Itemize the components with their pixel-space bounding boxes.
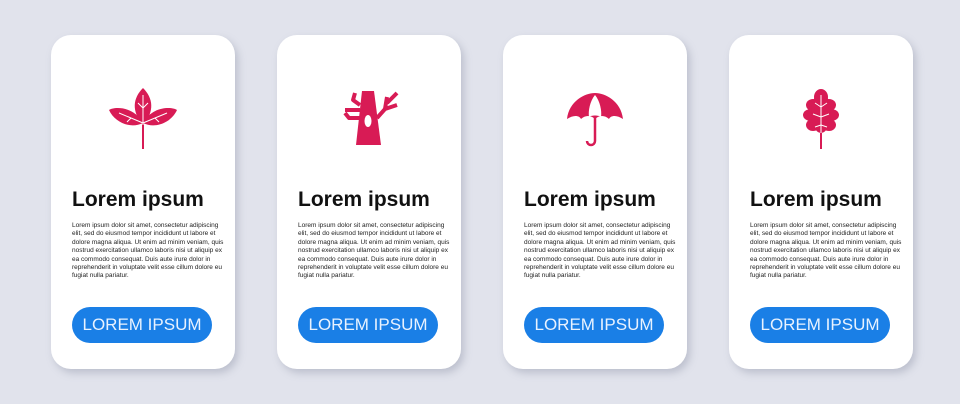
- button: LOREM IPSUM: [534, 315, 654, 334]
- icon: umbrella: [567, 93, 623, 146]
- card 1: leaf: [51, 35, 235, 369]
- heading: Lorem ipsum: [750, 188, 882, 211]
- body text: Lorem ipsum dolor sit amet, consectetur adipiscing elit, sed do eiusmod tempor incididunt ut labore et dolore magna aliqua. Ut enim ad minim veniam, quis nostrud exercitation ullamco laboris nisi ut aliquip ex ea commodo consequat. Duis aute irure dolor in reprehenderit in voluptate velit esse cillum dolore eu fugiat nulla pariatur.: [524, 222, 675, 279]
- body text: Lorem ipsum dolor sit amet, consectetur adipiscing elit, sed do eiusmod tempor incididunt ut labore et dolore magna aliqua. Ut enim ad minim veniam, quis nostrud exercitation ullamco laboris nisi ut aliquip ex ea commodo consequat. Duis aute irure dolor in reprehenderit in voluptate velit esse cillum dolore eu fugiat nulla pariatur.: [298, 222, 449, 279]
- button: [298, 307, 438, 343]
- body text: Lorem ipsum dolor sit amet, consectetur adipiscing elit, sed do eiusmod tempor incididunt ut labore et dolore magna aliqua. Ut enim ad minim veniam, quis nostrud exercitation ullamco laboris nisi ut aliquip ex ea commodo consequat. Duis aute irure dolor in reprehenderit in voluptate velit esse cillum dolore eu fugiat nulla pariatur.: [750, 222, 901, 279]
- button: [72, 307, 212, 343]
- body text: Lorem ipsum dolor sit amet, consectetur adipiscing elit, sed do eiusmod tempor incididunt ut labore et dolore magna aliqua. Ut enim ad minim veniam, quis nostrud exercitation ullamco laboris nisi ut aliquip ex ea commodo consequat. Duis aute irure dolor in reprehenderit in voluptate velit esse cillum dolore eu fugiat nulla pariatur.: [72, 222, 223, 279]
- button: LOREM IPSUM: [760, 315, 880, 334]
- icon: leaf: [109, 88, 177, 149]
- button: LOREM IPSUM: [82, 315, 202, 334]
- icon: dead tree: [344, 91, 398, 145]
- card 3: umbrella: [503, 35, 687, 369]
- button: LOREM IPSUM: [308, 315, 428, 334]
- card 2: tree: [277, 35, 461, 369]
- heading: Lorem ipsum: [72, 188, 204, 211]
- button: [524, 307, 664, 343]
- heading: Lorem ipsum: [524, 188, 656, 211]
- icon: oak leaf: [803, 89, 839, 149]
- card 4: oak leaf: [729, 35, 913, 369]
- heading: Lorem ipsum: [298, 188, 430, 211]
- button: [750, 307, 890, 343]
